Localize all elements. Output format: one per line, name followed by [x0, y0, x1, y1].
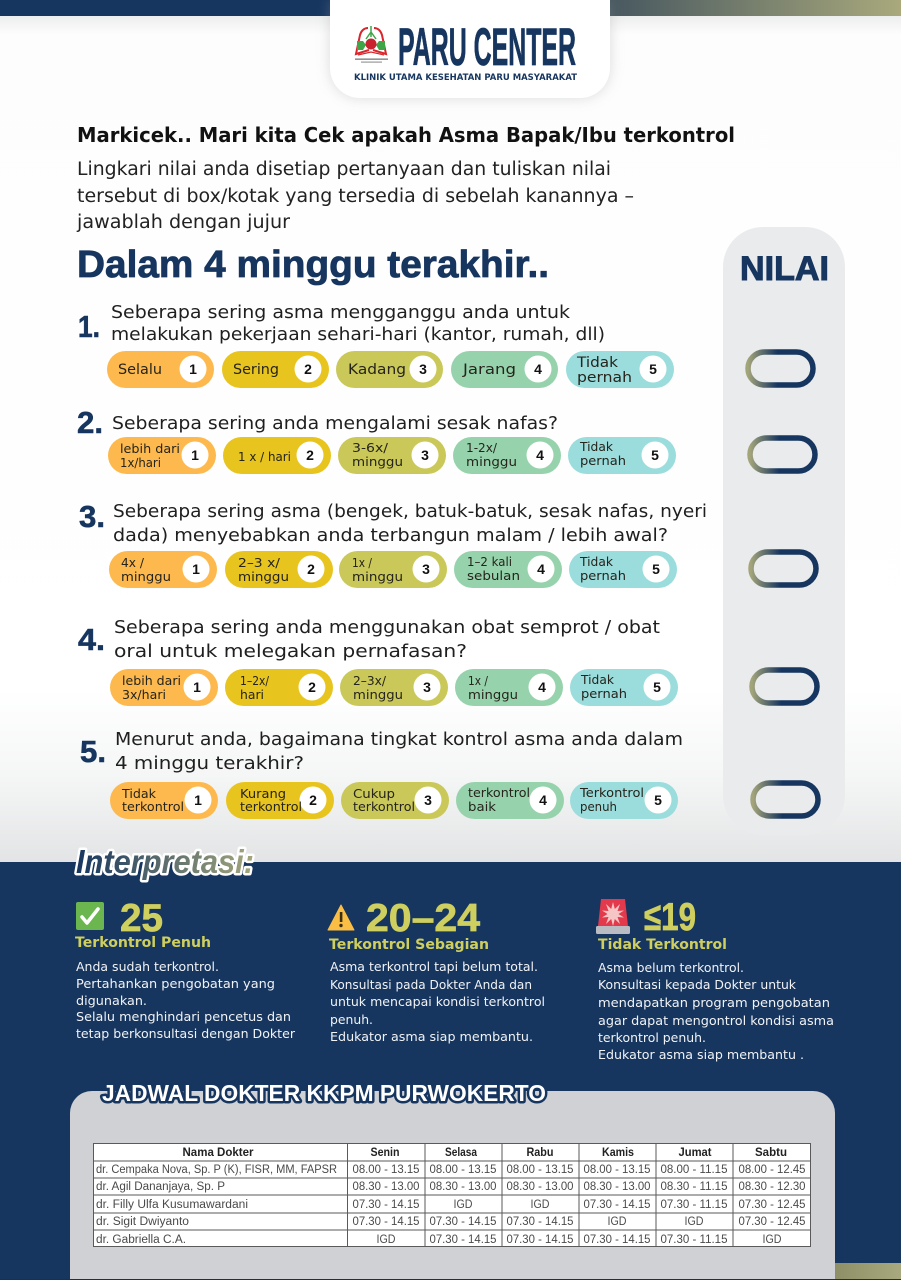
row: dr. Filly: dr. Filly Ulfa Kusumawardani: [96, 1199, 248, 1211]
answer options 5: Cukup: [353, 786, 395, 801]
instructions text: tersebut di box/kotak yang tersedia di sebelah kanannya –: [77, 186, 634, 207]
question 4: 4.: [78, 622, 105, 657]
question 4: oral untuk melegakan pernafasan?: [114, 641, 467, 662]
interpretation: not controlled: Asma belum terkontrol.: [598, 960, 744, 975]
row: dr. Sigit: 07.30 - 12.45: [738, 1216, 806, 1228]
row: dr. Cempaka: dr. Cempaka Nova, Sp. P (K), FISR, MM, FAPSR: [96, 1164, 337, 1176]
answer options 2: Tidak: [579, 439, 614, 454]
interpretation: partly controlled: [328, 897, 545, 1044]
answer options 5: [110, 782, 678, 819]
row: dr. Filly: 07.30 - 14.15: [352, 1199, 420, 1211]
row: dr. Filly: 07.30 - 14.15: [584, 1199, 650, 1211]
answer options 2: 1: [191, 447, 199, 463]
answer options 5: terkontrol: [468, 785, 530, 800]
interpretation: partly controlled: penuh.: [330, 1012, 373, 1027]
row: dr. Sigit: dr. Sigit Dwiyanto: [96, 1216, 189, 1228]
answer options 4: 3: [423, 679, 431, 695]
answer options 2: minggu: [352, 454, 403, 469]
answer options 4: 1x /: [468, 673, 489, 688]
interpretation: controlled: Selalu menghindari pencetus dan: [76, 1009, 291, 1024]
bottom edge line: [0, 1279, 901, 1280]
answer options 5: Terkontrol: [579, 785, 644, 800]
question 3: Seberapa sering asma (bengek, batuk-batuk, sesak nafas, nyeri: [113, 501, 707, 522]
row: dr. Gabriella: [96, 1234, 782, 1246]
answer options 4: 2–3x/: [353, 673, 387, 688]
question 5: Menurut anda, bagaimana tingkat kontrol asma anda dalam: [115, 729, 683, 750]
panel: interpretation background: [0, 862, 901, 1280]
interpretation: partly controlled: untuk mencapai kondisi terkontrol: [330, 994, 545, 1009]
answer options 5: 4: [539, 792, 547, 808]
answer options 4: [110, 669, 678, 706]
table header: Kamis: [602, 1147, 634, 1159]
interpretation: controlled: [75, 897, 296, 1041]
answer options 1: 1: [189, 361, 197, 377]
interpretation: controlled: digunakan.: [76, 993, 147, 1008]
answer options 2: 3-6x/: [352, 440, 389, 455]
heading: Markicek.. Mari kita Cek apakah Asma Bapak/Ibu terkontrol: [77, 123, 735, 147]
row: dr. Agil: 08.30 - 12.30: [738, 1181, 806, 1193]
row: dr. Filly: IGD: [530, 1199, 550, 1211]
answer options 4: 4: [538, 679, 546, 695]
answer options 5: penuh: [580, 799, 617, 814]
answer options 3: 2: [307, 561, 315, 577]
table header: Rabu: [526, 1147, 554, 1159]
answer options 2: [108, 437, 676, 474]
score box 3: [751, 552, 816, 585]
answer options 5: 1: [194, 792, 202, 808]
answer options 5: terkontrol: [122, 799, 184, 814]
answer options 1: Selalu: [118, 362, 162, 378]
interpretation: not controlled: ≤19: [644, 896, 696, 939]
score box 4: [752, 670, 817, 703]
answer options 1: Jarang: [462, 362, 516, 378]
interpretation: not controlled: Edukator asma siap membantu .: [598, 1047, 804, 1062]
row: dr. Agil: 08.30 - 13.00: [352, 1181, 420, 1193]
answer options 2: 2: [306, 447, 314, 463]
interpretation: partly controlled: 20–24: [366, 897, 480, 940]
panel: nilai column: [723, 227, 845, 835]
answer options 2: 1-2x/: [466, 440, 498, 455]
interpretation: not controlled: agar dapat mengontrol kondisi asma: [598, 1013, 834, 1028]
answer options 3: minggu: [352, 569, 403, 584]
interpretation: partly controlled: Asma terkontrol tapi belum total.: [330, 959, 538, 974]
answer options 2: lebih dari: [120, 441, 180, 456]
interpretation: not controlled: [596, 896, 834, 1062]
instructions text: jawablah dengan jujur: [76, 212, 290, 233]
answer options 4: Tidak: [580, 672, 615, 687]
question 1: 1.: [78, 309, 100, 344]
answer options 4: minggu: [468, 687, 518, 702]
table header: Jumat: [678, 1147, 712, 1159]
row: dr. Sigit: IGD: [608, 1216, 626, 1228]
answer options 5: baik: [468, 799, 497, 814]
answer options 4: 1: [193, 679, 201, 695]
table header: Sabtu: [755, 1147, 787, 1159]
interpretation heading: Interpretasi:: [76, 843, 254, 880]
row: dr. Cempaka: [96, 1164, 806, 1176]
answer options 2: 4: [536, 447, 544, 463]
answer options 1: pernah: [577, 370, 632, 386]
answer options 4: minggu: [353, 687, 403, 702]
row: dr. Gabriella: IGD: [762, 1234, 782, 1246]
icon: warning triangle: [328, 905, 354, 930]
interpretation: controlled: Anda sudah terkontrol.: [76, 959, 219, 974]
row: dr. Filly: [96, 1199, 806, 1211]
answer options 3: 1: [192, 561, 200, 577]
answer options 3: 1–2 kali: [467, 554, 512, 569]
row: dr. Gabriella: 07.30 - 14.15: [584, 1234, 650, 1246]
answer options 2: 5: [651, 447, 659, 463]
answer options 2: 1 x / hari: [238, 449, 291, 464]
question 3: [79, 499, 707, 588]
interpretation: not controlled: mendapatkan program pengobatan: [598, 995, 830, 1010]
answer options 5: terkontrol: [240, 799, 302, 814]
row: dr. Agil: 08.30 - 13.00: [506, 1181, 574, 1193]
row: dr. Filly: 07.30 - 11.15: [660, 1199, 728, 1211]
interpretation: controlled: tetap berkonsultasi dengan Dokter: [76, 1026, 296, 1041]
answer options 2: 3: [421, 447, 429, 463]
interpretation: controlled: Pertahankan pengobatan yang: [76, 976, 275, 991]
answer options 1: 4: [534, 361, 542, 377]
row: dr. Cempaka: 08.00 - 13.15: [352, 1164, 420, 1176]
row: dr. Cempaka: 08.00 - 13.15: [584, 1164, 650, 1176]
row: dr. Filly: IGD: [454, 1199, 472, 1211]
section heading: Dalam 4 minggu terakhir..: [77, 244, 549, 286]
icon: lungs logo: [355, 26, 388, 63]
answer options 3: [109, 551, 677, 588]
answer options 2: minggu: [466, 454, 517, 469]
row: dr. Agil: 08.30 - 13.00: [430, 1181, 496, 1193]
table header: Senin: [370, 1147, 400, 1159]
header logo card: [330, 0, 610, 98]
icon: green check: [76, 902, 104, 930]
row: dr. Gabriella: 07.30 - 14.15: [430, 1234, 496, 1246]
answer options 3: Tidak: [579, 554, 614, 569]
answer options 1: Kadang: [348, 362, 406, 378]
answer options 3: pernah: [580, 568, 626, 583]
row: dr. Agil: [96, 1181, 806, 1193]
answer options 3: minggu: [121, 569, 171, 584]
answer options 1: 5: [649, 361, 657, 377]
answer options 5: terkontrol: [353, 799, 415, 814]
score box 2: [750, 438, 815, 471]
brand tagline: KLINIK UTAMA KESEHATAN PARU MASYARAKAT: [354, 73, 577, 83]
schedule table: [93, 1143, 811, 1247]
row: dr. Gabriella: dr. Gabriella C.A.: [96, 1234, 186, 1246]
question 2: 2.: [77, 405, 103, 440]
interpretation: controlled: Terkontrol Penuh: [75, 935, 211, 951]
question 5: [80, 729, 683, 819]
row: dr. Cempaka: 08.00 - 11.15: [660, 1164, 728, 1176]
answer options 1: [107, 351, 674, 388]
answer options 1: Sering: [233, 362, 279, 378]
answer options 1: 3: [419, 361, 427, 377]
table header: Selasa: [445, 1147, 478, 1159]
table header: [182, 1147, 787, 1159]
question 5: 4 minggu terakhir?: [115, 753, 304, 774]
answer options 4: lebih dari: [122, 673, 181, 688]
row: dr. Filly: 07.30 - 12.45: [738, 1199, 806, 1211]
row: dr. Sigit: [96, 1216, 806, 1228]
row: dr. Gabriella: 07.30 - 14.15: [506, 1234, 574, 1246]
interpretation: not controlled: terkontrol penuh.: [598, 1030, 706, 1045]
instructions text: [76, 159, 634, 233]
question 1: [78, 302, 674, 388]
row: dr. Gabriella: IGD: [376, 1234, 396, 1246]
row: dr. Cempaka: 08.00 - 13.15: [430, 1164, 496, 1176]
nilai heading: NILAI: [740, 250, 829, 288]
answer options 2: 1x/hari: [120, 455, 161, 470]
row: dr. Cempaka: 08.00 - 12.45: [738, 1164, 806, 1176]
question 3: dada) menyebabkan anda terbangun malam / lebih awal?: [113, 525, 668, 546]
answer options 3: 3: [422, 561, 430, 577]
answer options 5: 5: [654, 792, 662, 808]
answer options 4: pernah: [581, 686, 627, 701]
answer options 3: 2–3 x/: [238, 555, 281, 570]
answer options 3: 4: [537, 561, 545, 577]
answer options 4: 5: [653, 679, 661, 695]
row: dr. Cempaka: 08.00 - 13.15: [506, 1164, 574, 1176]
panel: schedule: [70, 1080, 835, 1280]
bottom right strip: [835, 1263, 901, 1280]
question 1: Seberapa sering asma mengganggu anda untuk: [111, 302, 571, 323]
row: dr. Sigit: 07.30 - 14.15: [506, 1216, 574, 1228]
interpretation: not controlled: Tidak Terkontrol: [598, 937, 727, 953]
answer options 4: 1–2x/: [240, 673, 270, 688]
answer options 3: 5: [652, 561, 660, 577]
answer options 3: sebulan: [467, 568, 520, 583]
instructions text: Lingkari nilai anda disetiap pertanyaan dan tuliskan nilai: [77, 159, 611, 180]
question 2: Seberapa sering anda mengalami sesak nafas?: [112, 413, 558, 434]
answer options 1: Tidak: [576, 355, 619, 371]
score box 5: [753, 783, 818, 816]
table header: Nama Dokter: [182, 1147, 254, 1159]
answer options 4: hari: [240, 687, 264, 702]
top bar left: [0, 0, 335, 16]
interpretation: controlled: 25: [120, 897, 163, 940]
interpretation: partly controlled: Edukator asma siap membantu.: [330, 1029, 533, 1044]
answer options 5: 3: [424, 792, 432, 808]
question 3: 3.: [79, 499, 105, 534]
question 4: Seberapa sering anda menggunakan obat semprot / obat: [114, 617, 660, 638]
answer options 3: minggu: [238, 569, 289, 584]
row: dr. Gabriella: 07.30 - 11.15: [660, 1234, 728, 1246]
answer options 2: pernah: [580, 453, 626, 468]
answer options 5: Kurang: [240, 786, 286, 801]
answer options 4: 2: [308, 679, 316, 695]
row: dr. Agil: 08.30 - 11.15: [660, 1181, 728, 1193]
interpretation: not controlled: Konsultasi kepada Dokter untuk: [598, 977, 797, 992]
answer options 3: 1x /: [352, 555, 373, 570]
question 2: [77, 405, 676, 474]
row: dr. Agil: 08.30 - 13.00: [584, 1181, 650, 1193]
score box 1: [748, 352, 813, 385]
interpretation: partly controlled: Terkontrol Sebagian: [329, 937, 489, 953]
row: dr. Agil: dr. Agil Dananjaya, Sp. P: [96, 1181, 225, 1193]
header logo card: PARU CENTER: [398, 18, 576, 77]
question 5: 5.: [80, 734, 106, 769]
schedule heading: JADWAL DOKTER KKPM PURWOKERTO: [102, 1080, 546, 1106]
page background: [0, 0, 901, 862]
interpretation: partly controlled: Konsultasi pada Dokter Anda dan: [330, 977, 532, 992]
answer options 5: 2: [309, 792, 317, 808]
row: dr. Sigit: 07.30 - 14.15: [430, 1216, 496, 1228]
answer options 1: 2: [304, 361, 312, 377]
row: dr. Sigit: 07.30 - 14.15: [352, 1216, 420, 1228]
question 4: [78, 617, 678, 706]
answer options 4: 3x/hari: [122, 687, 166, 702]
icon: siren: [596, 899, 630, 934]
row: dr. Sigit: IGD: [684, 1216, 704, 1228]
top bar right: [605, 0, 901, 16]
question 1: melakukan pekerjaan sehari-hari (kantor, rumah, dll): [111, 324, 605, 345]
answer options 3: 4x /: [121, 555, 145, 570]
answer options 5: Tidak: [121, 786, 157, 801]
